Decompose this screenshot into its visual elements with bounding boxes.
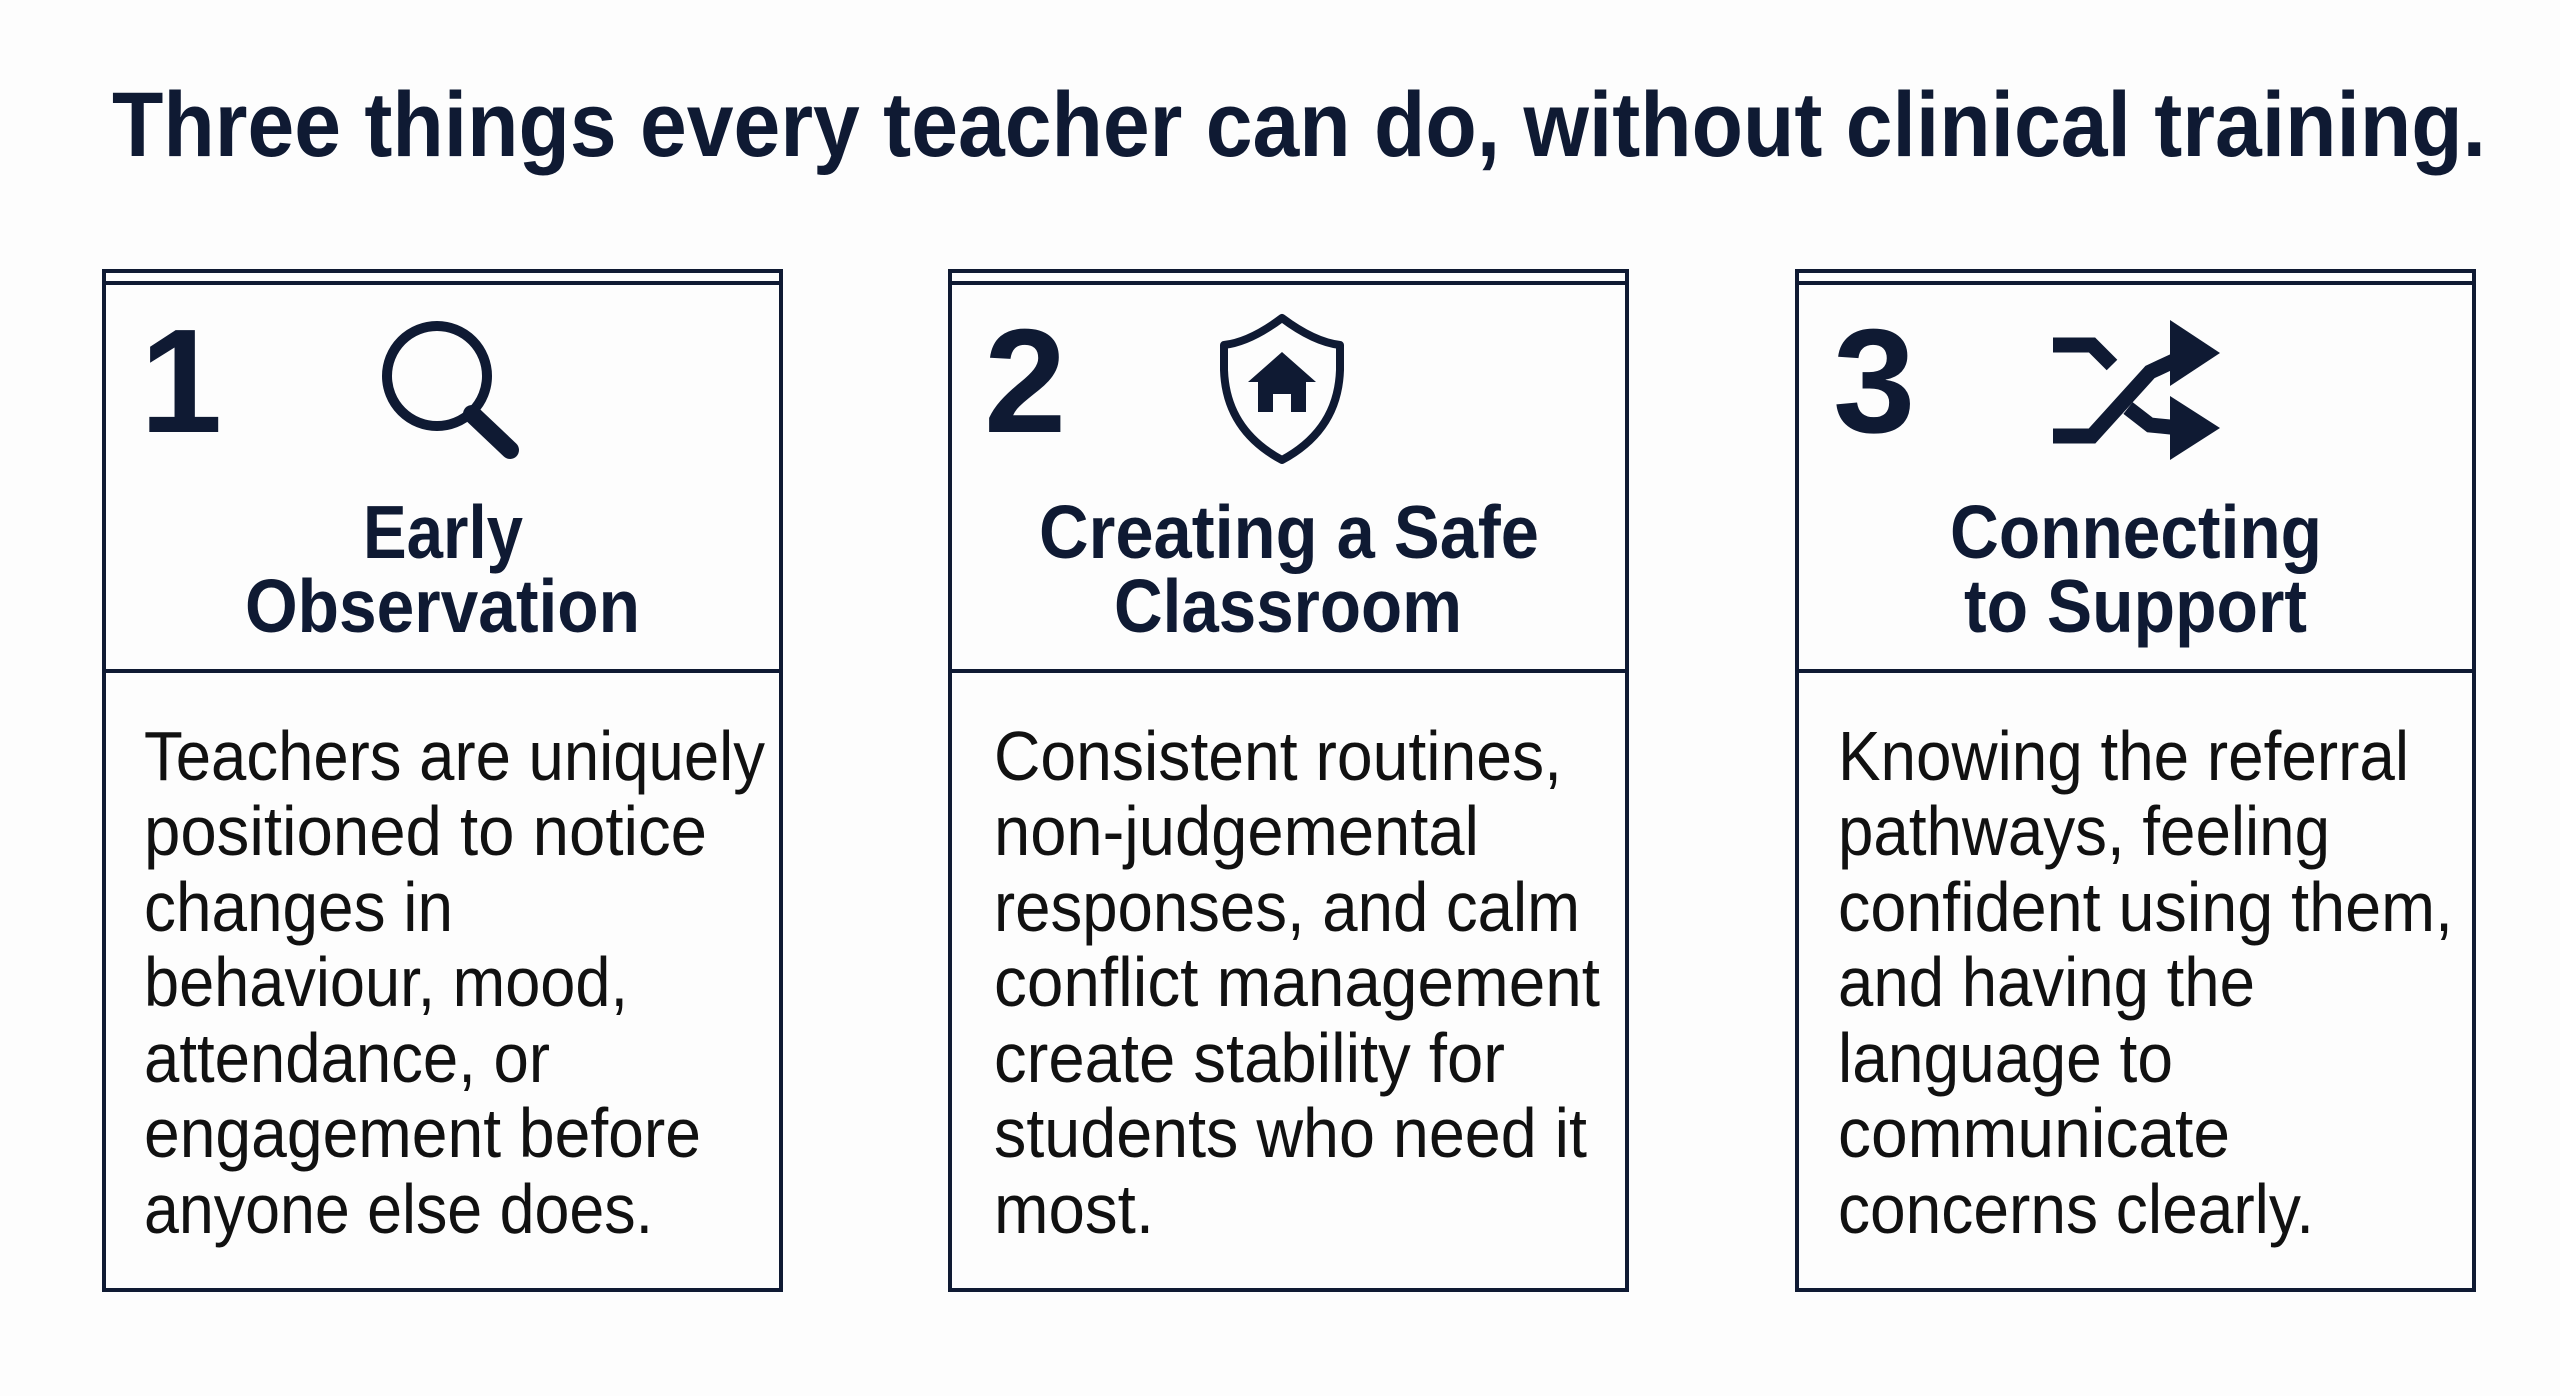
body text: pathways, feeling xyxy=(1838,792,2330,870)
body text: behaviour, mood, xyxy=(144,943,628,1021)
heading xyxy=(1039,490,1539,648)
body text: communicate xyxy=(1838,1094,2230,1172)
body text: language to xyxy=(1838,1019,2173,1097)
body text: confident using them, xyxy=(1838,868,2453,946)
heading: Connecting xyxy=(1950,490,2322,574)
panel: connecting to support xyxy=(1797,271,2474,1290)
heading: Observation xyxy=(245,564,640,648)
body text: create stability for xyxy=(994,1019,1505,1097)
heading: Creating a Safe xyxy=(1039,490,1539,574)
body text: attendance, or xyxy=(144,1019,550,1097)
heading xyxy=(245,490,640,648)
icon: shield with house xyxy=(1224,318,1340,460)
body text: responses, and calm xyxy=(994,868,1580,946)
body text: Consistent routines, xyxy=(994,717,1562,795)
number 1: 1 xyxy=(140,299,222,464)
body text: Knowing the referral xyxy=(1838,717,2409,795)
body text: engagement before xyxy=(144,1094,701,1172)
body text: conflict management xyxy=(994,943,1600,1021)
body text: non-judgemental xyxy=(994,792,1479,870)
body text: positioned to notice xyxy=(144,792,707,870)
body text xyxy=(994,717,1600,1248)
icon: shuffle arrows xyxy=(2053,320,2220,460)
heading xyxy=(1950,490,2322,648)
body text: and having the xyxy=(1838,943,2255,1021)
heading: Early xyxy=(363,490,523,574)
body text: anyone else does. xyxy=(144,1170,653,1248)
body text: students who need it xyxy=(994,1094,1587,1172)
heading: to Support xyxy=(1964,564,2307,648)
icon: magnifier xyxy=(387,326,510,450)
number 3: 3 xyxy=(1833,299,1915,464)
body text xyxy=(144,717,765,1248)
body text: Teachers are uniquely xyxy=(144,717,765,795)
body text xyxy=(1838,717,2453,1248)
heading: Classroom xyxy=(1114,564,1462,648)
number 2: 2 xyxy=(984,299,1066,464)
body text: changes in xyxy=(144,868,453,946)
panel: safe classroom xyxy=(950,271,1627,1290)
body text: concerns clearly. xyxy=(1838,1170,2314,1248)
body text: most. xyxy=(994,1170,1154,1248)
panel: early observation xyxy=(104,271,781,1290)
